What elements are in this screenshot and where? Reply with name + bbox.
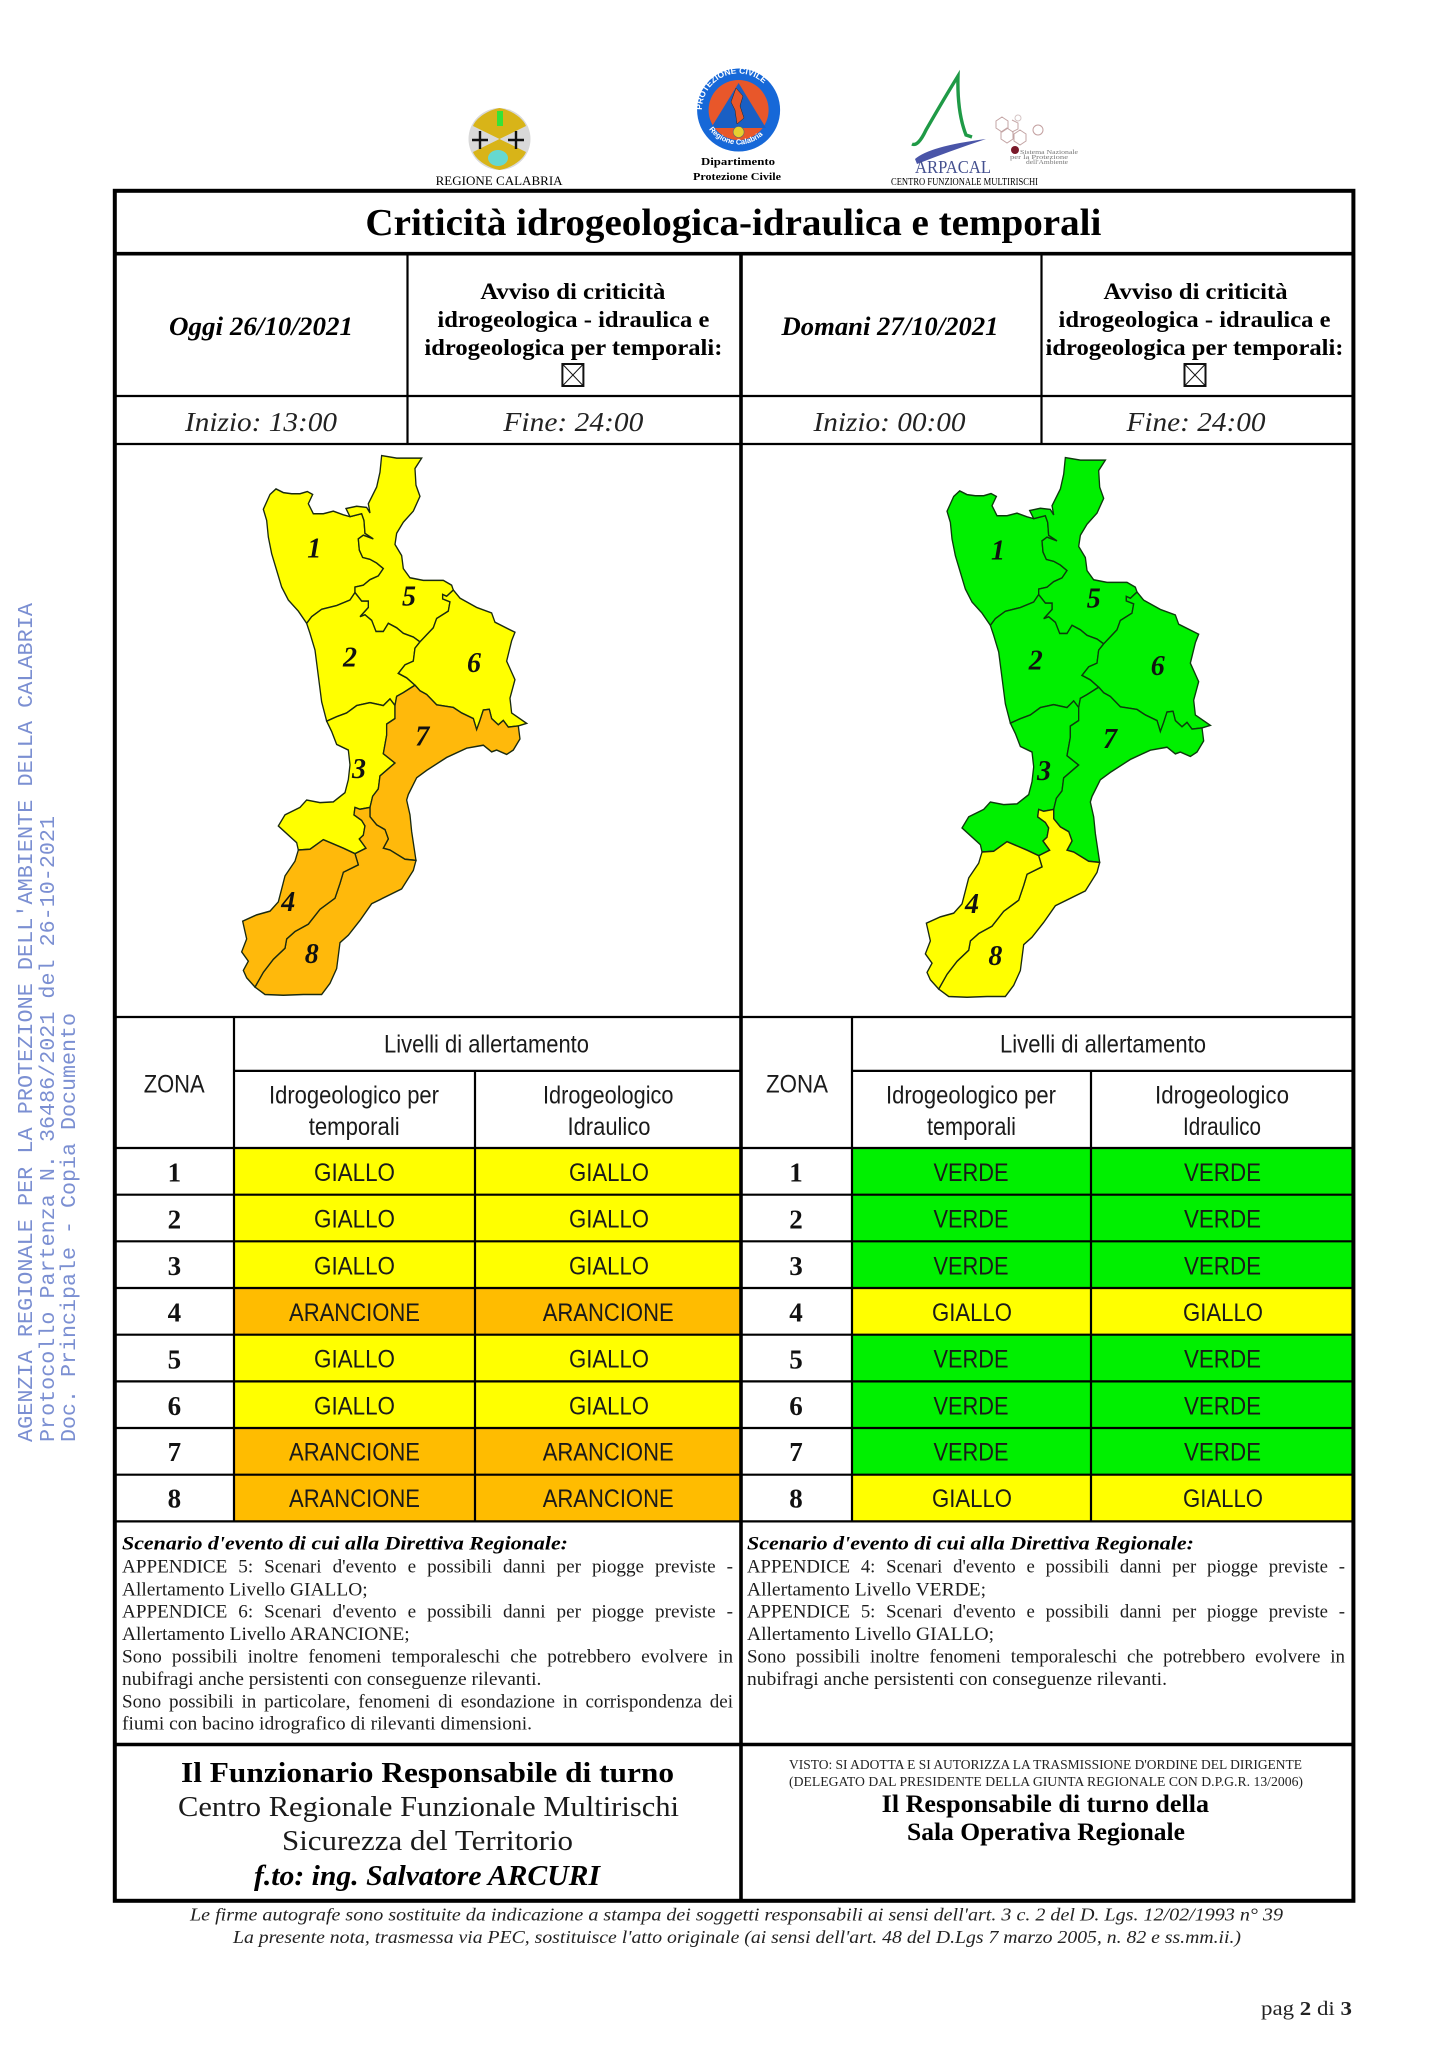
table: today alert levels: 3: [168, 1251, 181, 1281]
title: Criticità idrogeologica-idraulica e temporali: [365, 202, 1101, 244]
text block: tomorrow scenario: APPENDICE 4: Scenari d'evento e possibili danni per piogge previste -: [747, 1558, 1345, 1578]
signature: operations room: Sala Operativa Regionale: [907, 1819, 1185, 1846]
map: tomorrow: 1: [991, 535, 1005, 566]
signature: functionary: [178, 1758, 679, 1892]
side stamp text: [16, 603, 82, 1442]
table: today alert levels: ARANCIONE: [289, 1299, 420, 1327]
table: tomorrow alert levels: VERDE: [934, 1159, 1008, 1187]
map: today: 6: [467, 648, 481, 679]
table: tomorrow alert levels: temporali: [927, 1113, 1016, 1141]
map: tomorrow: 4: [964, 889, 979, 920]
map: today: 4: [280, 887, 295, 918]
page number: pag 2 di 3: [1261, 1999, 1352, 2020]
table: today alert levels: Idraulico: [568, 1113, 650, 1141]
map: tomorrow: 5: [1087, 584, 1101, 615]
panel: today header: Inizio: 13:00: [184, 407, 338, 437]
map: today: 2: [342, 643, 357, 674]
panel: today header: Oggi 26/10/2021: [169, 312, 353, 341]
table: today alert levels: GIALLO: [569, 1346, 649, 1374]
table: tomorrow alert levels: 2: [789, 1204, 803, 1234]
table: tomorrow alert levels: 4: [789, 1298, 803, 1328]
table: today alert levels: GIALLO: [314, 1346, 395, 1374]
table: tomorrow alert levels: GIALLO: [932, 1299, 1012, 1327]
table: tomorrow alert levels: 6: [789, 1391, 803, 1421]
logo: Protezione Civile: Dipartimento: [701, 156, 776, 168]
logo: ARPACAL: CENTRO FUNZIONALE MULTIRISCHI: [891, 177, 1038, 188]
table: today alert levels: 7: [168, 1437, 181, 1467]
panel: tomorrow header: Inizio: 00:00: [812, 407, 966, 437]
panel: today header: Fine: 24:00: [502, 407, 644, 437]
side stamp text: AGENZIA REGIONALE PER LA PROTEZIONE DELL'AMBIENTE DELLA CALABRIA: [16, 603, 39, 1442]
table: tomorrow alert levels: VERDE: [1184, 1252, 1261, 1280]
table: tomorrow alert levels: VERDE: [1184, 1159, 1261, 1187]
signature: functionary: Sicurezza del Territorio: [282, 1826, 573, 1857]
text block: tomorrow scenario: APPENDICE 5: Scenari d'evento e possibili danni per piogge previste -: [747, 1603, 1345, 1623]
table: tomorrow alert levels: VERDE: [1184, 1206, 1261, 1234]
table: today alert levels: GIALLO: [569, 1252, 649, 1280]
table: tomorrow alert levels: GIALLO: [1183, 1485, 1263, 1513]
table: tomorrow alert levels: GIALLO: [1183, 1299, 1263, 1327]
table: today alert levels: 6: [168, 1391, 181, 1421]
logo: Protezione Civile: Protezione Civile: [693, 171, 781, 183]
table: today alert levels: 4: [168, 1298, 181, 1328]
table: today alert levels: ARANCIONE: [543, 1299, 674, 1327]
table: today alert levels: 5: [168, 1344, 181, 1374]
map: today: 8: [305, 939, 319, 970]
text block: today scenario: nubifragi anche persistenti con conseguenze rilevanti.: [122, 1670, 541, 1690]
logo: Protezione Civile: Regione Calabria: [709, 126, 764, 145]
text block: tomorrow scenario: Sono possibili inoltre fenomeni temporaleschi che potrebbero evolvere in: [747, 1648, 1345, 1668]
logo: ARPACAL: [891, 76, 1078, 188]
map: tomorrow: 2: [1028, 646, 1043, 677]
side stamp text: Protocollo Partenza N. 36486/2021 del 26-10-2021: [38, 816, 61, 1442]
signature: functionary: f.to: ing. Salvatore ARCURI: [254, 1861, 601, 1892]
panel: today header: idrogeologica - idraulica e: [437, 307, 709, 332]
text block: tomorrow scenario: nubifragi anche persistenti con conseguenze rilevanti.: [747, 1670, 1167, 1690]
map: today: 5: [402, 582, 416, 613]
text block: today scenario: Allertamento Livello GIALLO;: [122, 1581, 368, 1601]
table: tomorrow alert levels: VERDE: [934, 1392, 1008, 1420]
text block: today scenario: Allertamento Livello ARANCIONE;: [122, 1625, 410, 1645]
map: tomorrow: 7: [1103, 724, 1118, 755]
table: tomorrow alert levels: VERDE: [1184, 1438, 1261, 1466]
map: tomorrow: 8: [988, 941, 1002, 972]
signature: operations room: Il Responsabile di turno della: [882, 1791, 1210, 1818]
table: tomorrow alert levels: 1: [789, 1158, 803, 1188]
table: today alert levels: 1: [168, 1158, 181, 1188]
table: today alert levels: Livelli di allertamento: [384, 1031, 589, 1059]
table: tomorrow alert levels: ZONA: [766, 1071, 828, 1099]
table: tomorrow alert levels: GIALLO: [932, 1485, 1012, 1513]
logo: ARPACAL: per la Protezione: [1010, 155, 1068, 161]
table: today alert levels: temporali: [309, 1113, 400, 1141]
text block: today scenario: APPENDICE 6: Scenari d'evento e possibili danni per piogge previste -: [122, 1603, 733, 1623]
text block: today scenario: Sono possibili inoltre fenomeni temporaleschi che potrebbero evolvere in: [122, 1648, 733, 1668]
table: tomorrow alert levels: Idrogeologico per: [886, 1082, 1056, 1110]
table: tomorrow alert levels: VERDE: [1184, 1346, 1261, 1374]
text block: today scenario: Sono possibili in particolare, fenomeni di esondazione in corrispondenza dei: [122, 1692, 733, 1712]
table: tomorrow alert levels: 3: [789, 1251, 803, 1281]
footer note: [189, 1905, 1283, 1947]
text block: today scenario: [122, 1533, 733, 1734]
table: tomorrow alert levels: 8: [789, 1484, 803, 1514]
signature: operations room: [789, 1757, 1303, 1846]
map: today: 1: [307, 533, 321, 564]
logo: ARPACAL: Sistema Nazionale: [1020, 150, 1078, 156]
table: tomorrow alert levels: Idrogeologico: [1155, 1082, 1289, 1110]
table: today alert levels: GIALLO: [569, 1159, 649, 1187]
footer note: La presente nota, trasmessa via PEC, sostituisce l'atto originale (ai sensi dell'art. 48 del D.Lgs 7 marzo 2005, n. 82 e ss.mm.ii.): [232, 1927, 1241, 1947]
map: today: 7: [415, 722, 430, 753]
signature: functionary: Centro Regionale Funzionale Multirischi: [178, 1792, 679, 1823]
text block: tomorrow scenario: [747, 1533, 1345, 1690]
table: today alert levels: GIALLO: [314, 1159, 395, 1187]
table: today alert levels: GIALLO: [314, 1206, 395, 1234]
table: today alert levels: ZONA: [144, 1071, 205, 1099]
panel: today header: [169, 279, 722, 437]
panel: tomorrow header: idrogeologica per temporali:: [1046, 335, 1344, 360]
map: tomorrow: 6: [1151, 651, 1165, 682]
map: tomorrow: 3: [1036, 756, 1051, 787]
text block: tomorrow scenario: Allertamento Livello VERDE;: [747, 1581, 986, 1601]
table: today alert levels: GIALLO: [314, 1392, 395, 1420]
signature: functionary: Il Funzionario Responsabile di turno: [181, 1758, 674, 1789]
panel: tomorrow header: [780, 279, 1344, 437]
footer note: Le firme autografe sono sostituite da indicazione a stampa dei soggetti responsabili ai sensi dell'art. 3 c. 2 del D. Lgs. 12/02/1993 n° 39: [189, 1905, 1283, 1925]
table: tomorrow alert levels: [766, 1031, 1353, 1521]
table: today alert levels: 8: [168, 1484, 181, 1514]
table: today alert levels: Idrogeologico per: [269, 1082, 439, 1110]
table: tomorrow alert levels: 7: [789, 1437, 803, 1467]
signature: operations room: (DELEGATO DAL PRESIDENTE DELLA GIUNTA REGIONALE CON D.P.G.R. 13/2006): [789, 1774, 1303, 1789]
text block: tomorrow scenario: Scenario d'evento di cui alla Direttiva Regionale:: [747, 1533, 1194, 1554]
table: today alert levels: 2: [168, 1204, 181, 1234]
panel: tomorrow header: Fine: 24:00: [1125, 407, 1266, 437]
table: today alert levels: GIALLO: [314, 1252, 395, 1280]
text block: tomorrow scenario: Allertamento Livello GIALLO;: [747, 1625, 994, 1645]
table: today alert levels: ARANCIONE: [289, 1438, 420, 1466]
panel: today header: Avviso di criticità: [480, 279, 666, 304]
text block: today scenario: fiumi con bacino idrografico di rilevanti dimensioni.: [122, 1714, 532, 1734]
table: tomorrow alert levels: 5: [789, 1344, 803, 1374]
panel: tomorrow header: Avviso di criticità: [1104, 279, 1288, 304]
table: tomorrow alert levels: VERDE: [1184, 1392, 1261, 1420]
table: today alert levels: ARANCIONE: [543, 1485, 674, 1513]
table: tomorrow alert levels: Livelli di allertamento: [1000, 1031, 1206, 1059]
table: tomorrow alert levels: VERDE: [934, 1346, 1008, 1374]
side stamp text: Doc. Principale - Copia Documento: [59, 1013, 82, 1442]
text block: today scenario: APPENDICE 5: Scenari d'evento e possibili danni per piogge previste -: [122, 1558, 733, 1578]
table: today alert levels: GIALLO: [569, 1392, 649, 1420]
map: today: 3: [351, 754, 366, 785]
logo: Protezione Civile: [693, 68, 781, 183]
table: today alert levels: Idrogeologico: [543, 1082, 674, 1110]
table: tomorrow alert levels: VERDE: [934, 1438, 1008, 1466]
table: today alert levels: [144, 1031, 741, 1521]
map: tomorrow: [925, 458, 1210, 997]
signature: operations room: VISTO: SI ADOTTA E SI AUTORIZZA LA TRASMISSIONE D'ORDINE DEL DIRIGENTE: [789, 1757, 1302, 1772]
logo: Protezione Civile: PROTEZIONE CIVILE: [697, 68, 767, 110]
table: tomorrow alert levels: Idraulico: [1183, 1113, 1261, 1141]
map: today: [242, 456, 527, 995]
table: today alert levels: GIALLO: [569, 1206, 649, 1234]
table: today alert levels: ARANCIONE: [543, 1438, 674, 1466]
panel: today header: idrogeologica per temporali:: [424, 335, 722, 360]
table: tomorrow alert levels: VERDE: [934, 1206, 1008, 1234]
panel: tomorrow header: idrogeologica - idraulica e: [1058, 307, 1330, 332]
logo: ARPACAL: ARPACAL: [915, 157, 991, 177]
text block: today scenario: Scenario d'evento di cui alla Direttiva Regionale:: [122, 1533, 568, 1554]
logo: Regione Calabria: REGIONE CALABRIA: [436, 173, 563, 188]
panel: tomorrow header: Domani 27/10/2021: [780, 312, 998, 341]
table: tomorrow alert levels: VERDE: [934, 1252, 1008, 1280]
table: today alert levels: ARANCIONE: [289, 1485, 420, 1513]
logo: Regione Calabria: [436, 108, 563, 188]
logo: ARPACAL: dell'Ambiente: [1026, 160, 1068, 166]
